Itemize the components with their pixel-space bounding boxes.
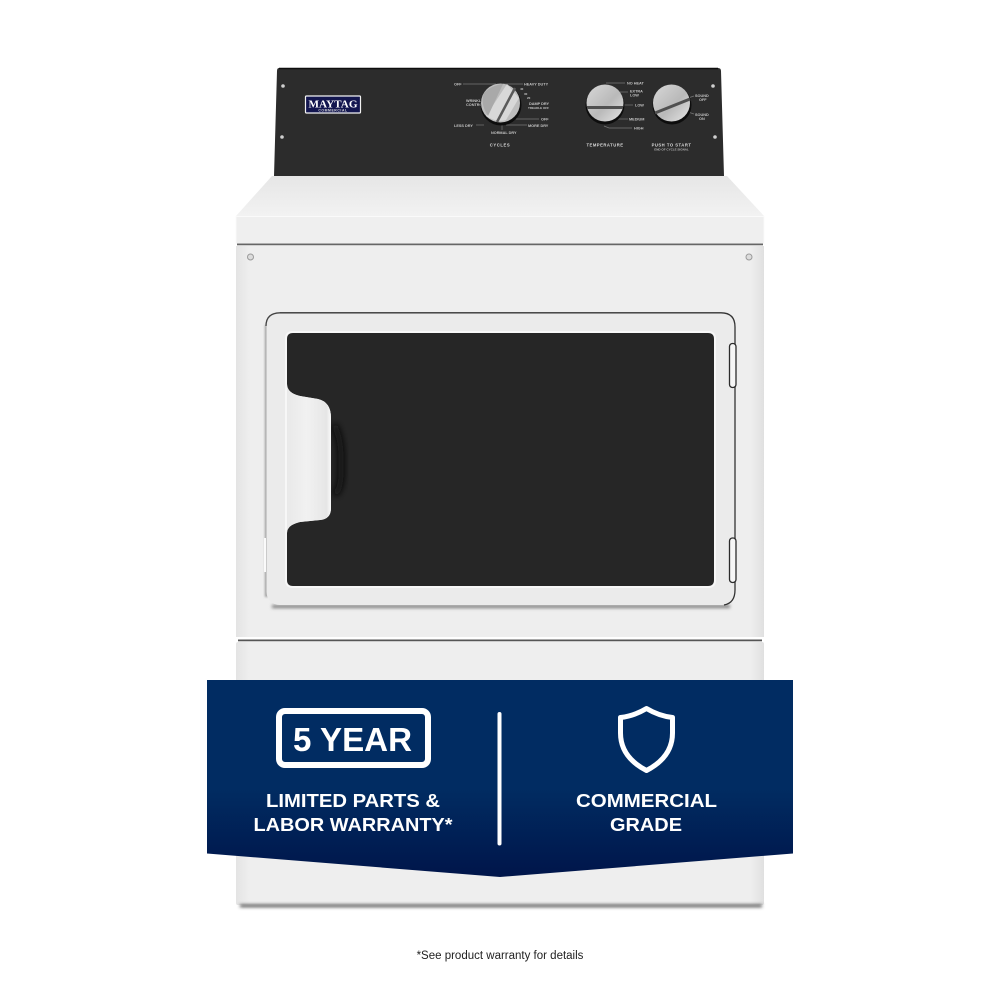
cycles dial with labels: NORMAL DRY <box>491 131 517 135</box>
push to start dial with labels: ON <box>699 117 705 121</box>
lower hinge <box>730 538 736 582</box>
top lid <box>236 176 764 216</box>
Maytag Commercial badge <box>306 96 360 113</box>
cycles dial with labels: DAMP DRY <box>529 102 550 106</box>
push to start dial with labels <box>652 84 709 152</box>
handle recess shadow <box>334 425 341 494</box>
push to start dial with labels: SOUND <box>695 113 709 117</box>
cycles dial with labels: OFF <box>541 118 549 122</box>
temperature dial with labels: LOW <box>630 94 639 98</box>
door window <box>287 333 714 586</box>
warranty text: LABOR WARRANTY* <box>254 814 453 835</box>
temperature dial with labels <box>586 82 644 148</box>
dryer appliance <box>236 68 764 907</box>
door handle <box>287 384 331 533</box>
temperature dial with labels: NO HEAT <box>627 82 644 86</box>
front lip <box>236 216 764 244</box>
cycles dial with labels: WRINKLE <box>466 99 484 103</box>
cycles dial with labels: 30 <box>524 92 528 96</box>
push to start dial with labels: PUSH TO START <box>652 142 691 148</box>
cycles dial with labels: TREADLE OFF <box>528 106 549 110</box>
banner <box>207 680 793 877</box>
Maytag Commercial badge: COMMERCIAL <box>318 108 348 112</box>
5 year warranty block <box>254 711 453 835</box>
cycles dial with labels: 20 <box>527 96 531 100</box>
commercial grade block <box>576 708 717 835</box>
push to start dial with labels: SOUND <box>695 94 709 98</box>
5 year badge: 5 YEAR <box>293 722 412 759</box>
warranty text <box>254 790 453 835</box>
5 year badge <box>279 711 428 765</box>
cycles dial with labels: CONTROL <box>466 103 485 107</box>
commercial grade text: GRADE <box>610 814 682 835</box>
push to start dial with labels: OFF <box>699 98 707 102</box>
cycles dial with labels: LESS DRY <box>454 124 473 128</box>
cycles dial with labels: MORE DRY <box>528 124 549 128</box>
temperature dial with labels: MEDIUM <box>629 118 644 122</box>
main cabinet <box>236 244 764 637</box>
divider <box>498 712 502 846</box>
door <box>264 313 736 608</box>
footnote: *See product warranty for details <box>417 950 584 962</box>
cycles dial with labels: 40 <box>520 87 524 91</box>
cycles dial with labels: HEAVY DUTY <box>524 82 549 86</box>
upper hinge <box>730 344 736 388</box>
control panel <box>274 68 724 176</box>
warranty text: LIMITED PARTS & <box>266 790 440 811</box>
temperature dial with labels: TEMPERATURE <box>586 142 624 148</box>
temperature dial with labels: LOW <box>635 104 644 108</box>
cycles dial with labels: OFF <box>454 82 462 86</box>
cycles dial with labels <box>454 82 550 148</box>
push to start dial with labels: END OF CYCLE SIGNAL <box>654 148 689 152</box>
temperature dial with labels: HIGH <box>634 126 644 130</box>
commercial grade text <box>576 790 717 835</box>
cycles dial with labels: CYCLES <box>490 142 510 148</box>
base cabinet <box>236 640 764 907</box>
commercial grade text: COMMERCIAL <box>576 790 717 811</box>
temperature dial with labels: EXTRA <box>630 90 643 94</box>
icon: shield <box>620 708 672 770</box>
Maytag Commercial badge: MAYTAG <box>308 98 358 110</box>
